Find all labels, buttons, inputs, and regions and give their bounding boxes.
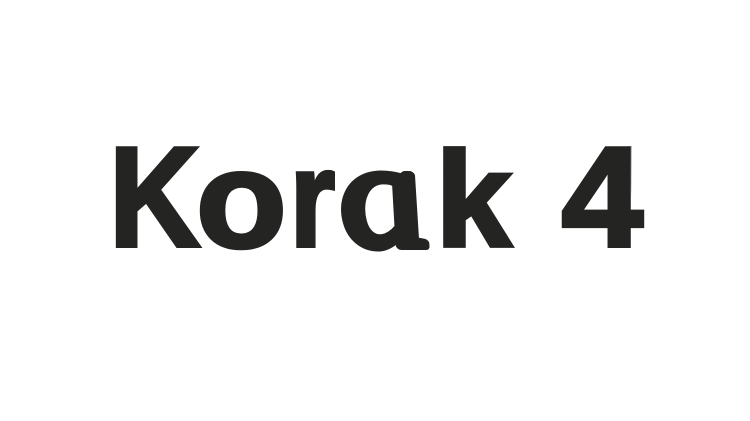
- title: Korak 4: r: [290, 123, 335, 276]
- title: Korak 4: [109, 111, 643, 279]
- title: Korak 4: a: [312, 111, 445, 279]
- title: Korak 4: o: [196, 123, 287, 277]
- title: Korak 4: k: [436, 124, 512, 275]
- title: Korak 4: 4: [562, 118, 643, 277]
- title: Korak 4: K: [109, 119, 200, 277]
